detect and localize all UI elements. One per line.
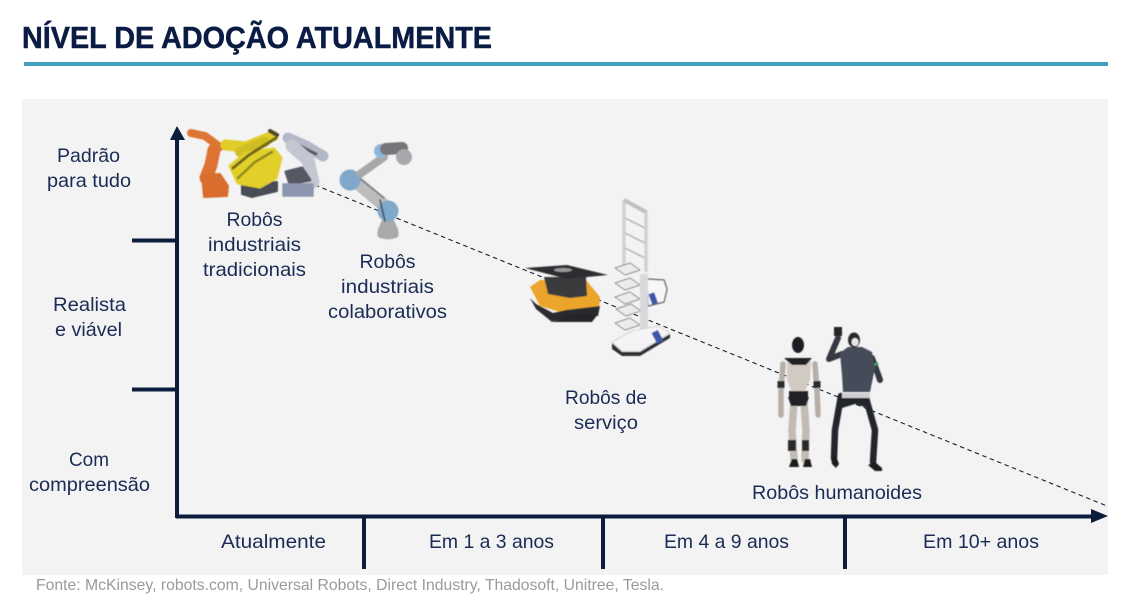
x label: Atualmente: Atualmente — [221, 531, 326, 553]
label: Robôs humanoides: Robôs humanoides — [752, 482, 922, 504]
y label: Com compreensão: Com — [69, 449, 109, 471]
y label: Realista e viável: e viável — [55, 319, 122, 341]
label: Robôs industriais colaborativos: Robôs — [360, 251, 416, 273]
x label: Em 1 a 3 anos: Em 1 a 3 anos — [429, 531, 554, 553]
white gray robot — [283, 138, 323, 196]
dashed adoption trend line — [315, 185, 1107, 506]
x label: Em 10+ anos: Em 10+ anos — [923, 531, 1039, 553]
title: NÍVEL DE ADOÇÃO ATUALMENTE — [22, 20, 492, 55]
icon: traditional industrial robots — [191, 131, 323, 197]
x label: Em 4 a 9 anos: Em 4 a 9 anos — [664, 531, 789, 553]
y axis separators — [132, 238, 177, 392]
silver humanoid — [781, 337, 818, 467]
y label: Com compreensão — [29, 449, 150, 496]
y label: Padrão para tudo: para tudo — [47, 170, 131, 192]
label: Robôs de serviço — [565, 387, 647, 434]
y label: Realista e viável — [53, 294, 126, 341]
dark humanoid — [829, 327, 882, 471]
title underline — [24, 62, 1108, 66]
icon: humanoid robots — [781, 327, 882, 471]
source note: Fonte: McKinsey, robots.com, Universal Robots, Direct Industry, Thadosoft, Unitree, Tesla. — [36, 577, 664, 594]
panel: chart background — [22, 99, 1108, 575]
icon: collaborative robot — [340, 144, 412, 239]
vertical axis arrow — [170, 126, 185, 518]
yellow robot — [226, 131, 281, 197]
orange mobile robot — [525, 265, 608, 322]
label: Robôs industriais colaborativos: industriais — [341, 276, 434, 298]
orange robot — [191, 133, 228, 197]
y label: Com compreensão: compreensão — [29, 474, 150, 496]
x axis separators — [362, 516, 847, 569]
label: Robôs industriais tradicionais: Robôs — [226, 209, 283, 231]
white shelf robot — [612, 200, 670, 356]
icon: service robots — [525, 200, 670, 356]
label: Robôs industriais colaborativos: colaborativos — [328, 301, 447, 323]
y label: Realista e viável: Realista — [53, 294, 126, 316]
label: Robôs industriais tradicionais — [203, 209, 306, 281]
label: Robôs de serviço: Robôs de — [565, 387, 647, 409]
y label: Padrão para tudo — [47, 145, 131, 192]
y label: Padrão para tudo: Padrão — [57, 145, 120, 167]
label: Robôs industriais colaborativos — [328, 251, 447, 323]
label: Robôs industriais tradicionais: industriais — [208, 234, 301, 256]
label: Robôs de serviço: serviço — [574, 412, 638, 434]
label: Robôs industriais tradicionais: tradicionais — [203, 259, 306, 281]
horizontal axis arrow — [176, 509, 1108, 523]
